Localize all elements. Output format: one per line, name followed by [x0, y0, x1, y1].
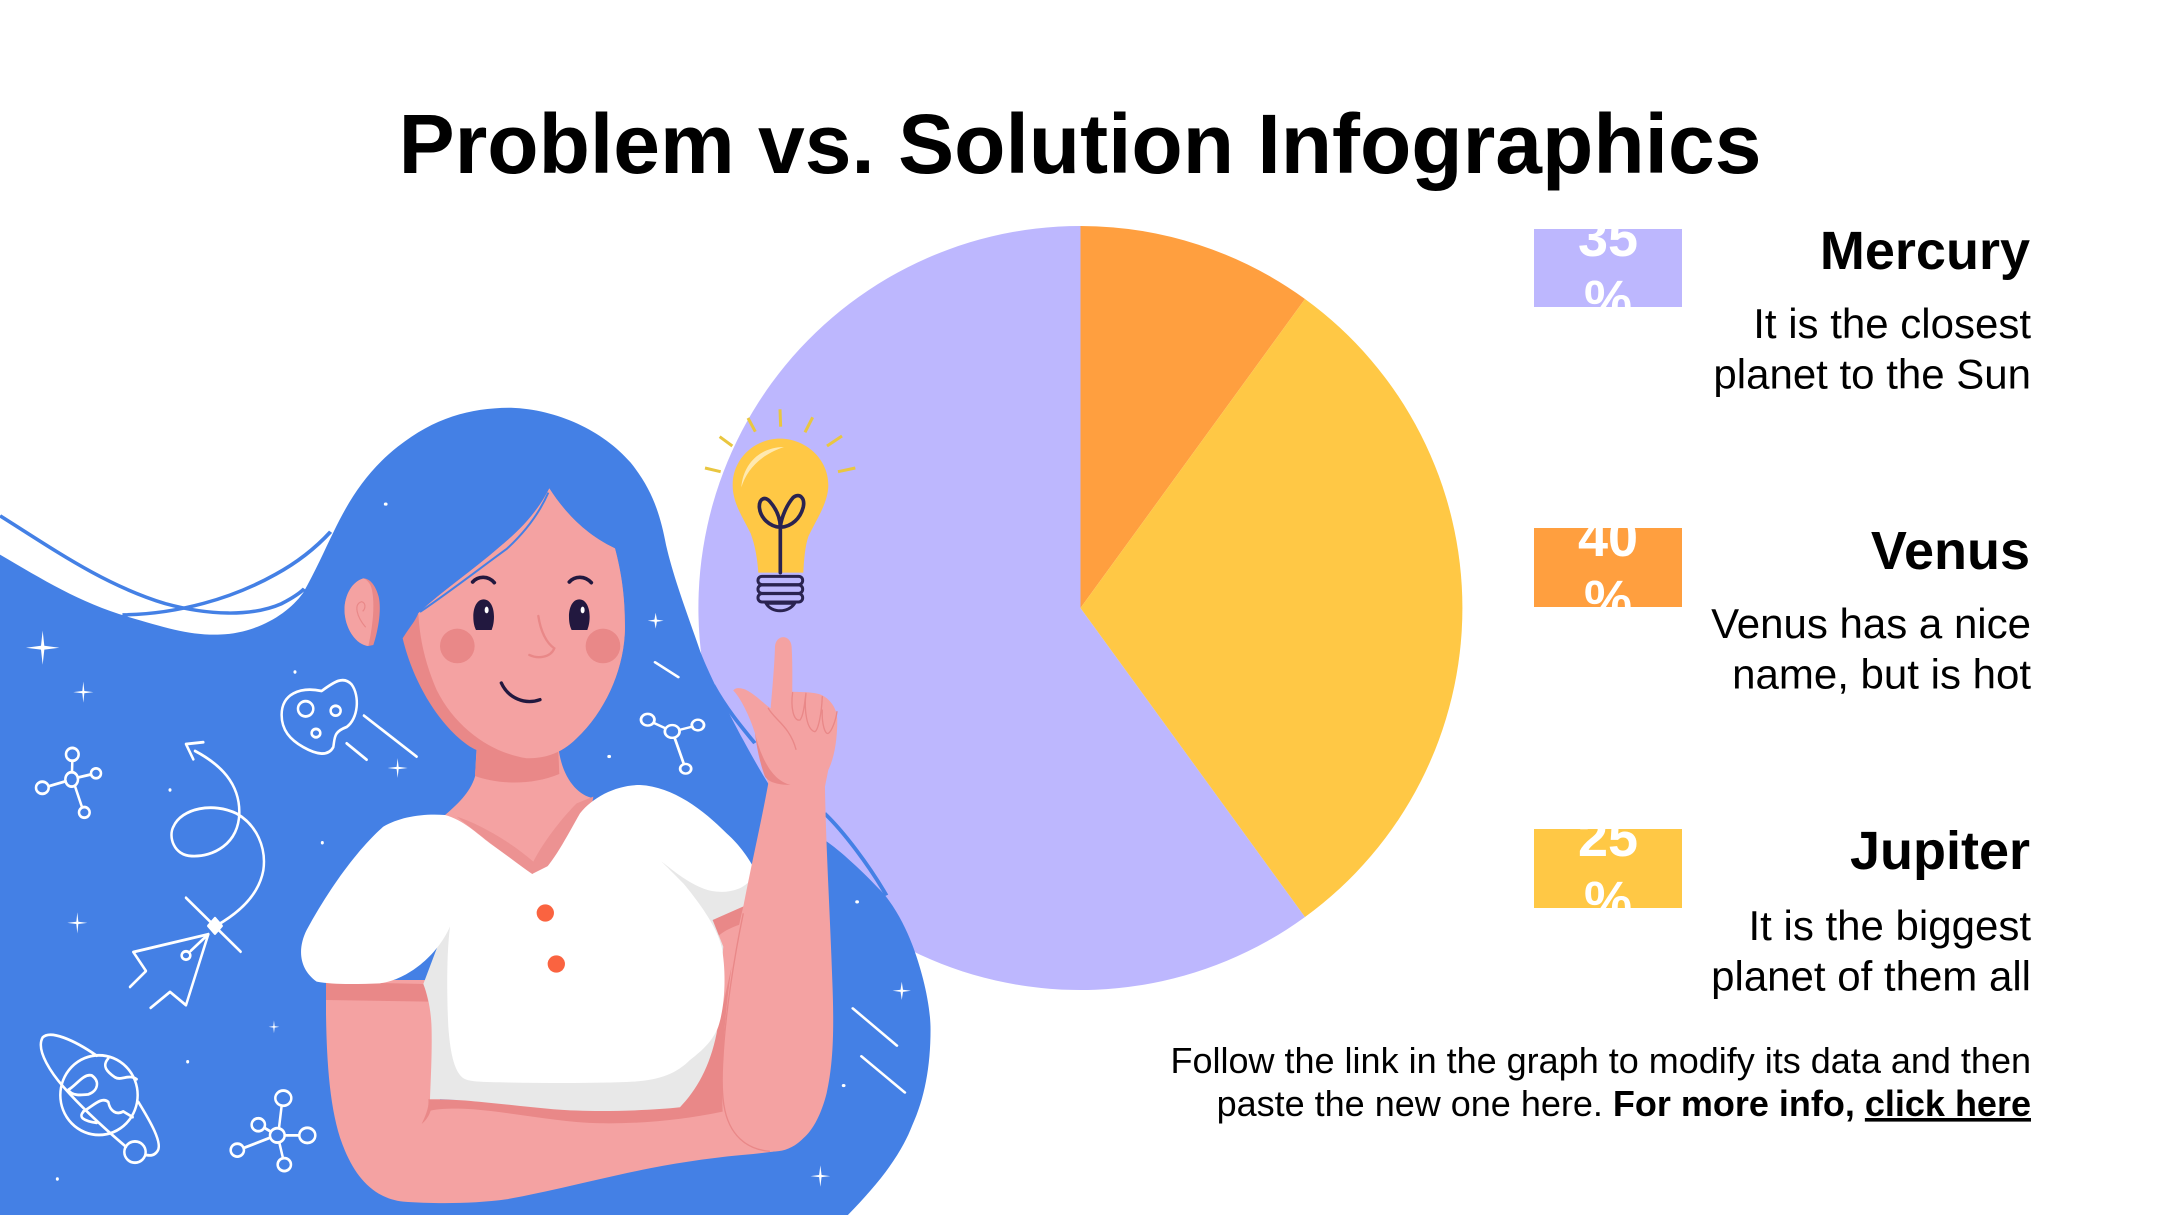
pie slice: purple [698, 226, 1305, 990]
nose [529, 616, 554, 657]
percent box 35%: 35 [1578, 208, 1638, 268]
space doodles [26, 631, 417, 1179]
curved arrow [171, 742, 264, 952]
molecule left [36, 748, 101, 818]
stars [26, 631, 408, 1033]
arm fold shadow [422, 967, 732, 1124]
footer note: paste the new one here. [1217, 1083, 1613, 1124]
footer note: For more info, click here [1613, 1083, 2031, 1124]
asteroid [282, 680, 417, 760]
description: Venus has a nice [1711, 600, 2031, 647]
legend: Jupiter [1534, 829, 2031, 999]
molecule bottom [231, 1091, 315, 1171]
small dots [386, 504, 857, 1086]
legend: Venus [1534, 528, 2031, 694]
neck shadow [475, 750, 559, 782]
description: It is the biggest [1748, 902, 2031, 949]
small dots [57, 672, 322, 1179]
forearm edge [722, 913, 770, 1151]
shadow behind right sleeve [713, 903, 748, 936]
cheeks [440, 629, 620, 663]
bang strand [420, 493, 548, 612]
eyebrows [473, 577, 591, 583]
hair strands [0, 516, 886, 895]
percent box 40%: 40 [1578, 508, 1638, 568]
wrist crease [755, 733, 791, 785]
stars [648, 613, 911, 1187]
percent box 35%: % [1584, 270, 1632, 330]
percent box 25% [1534, 829, 1682, 908]
heading: Mercury [1820, 221, 2030, 281]
button top [537, 904, 554, 922]
shirt body [447, 840, 725, 1083]
ear [345, 578, 380, 646]
chest shading [457, 797, 593, 880]
pie chart [698, 226, 1462, 990]
light rays [705, 409, 855, 472]
button bottom [548, 955, 565, 973]
planet with ring and moon [41, 1035, 159, 1163]
bulb highlight [741, 447, 784, 487]
molecule right [641, 714, 704, 774]
forearm and hand [723, 637, 837, 1152]
filament [759, 496, 804, 573]
eyes [473, 599, 590, 630]
smile [501, 683, 540, 701]
heading: Jupiter [1850, 821, 2030, 881]
shirt sleeve left [301, 815, 537, 984]
space doodles right [386, 504, 911, 1187]
eye highlights [485, 607, 585, 613]
upper arm and lower arm [326, 903, 773, 1203]
pie slice: yellow [1080, 299, 1462, 917]
title: Problem vs. Solution Infographics [399, 97, 1761, 191]
description: planet to the Sun [1713, 350, 2031, 398]
sleeve shadow on arm [326, 982, 428, 1002]
illustration: girl with idea [0, 408, 931, 1215]
face [418, 488, 625, 758]
bulb base [758, 576, 803, 611]
pie slice: orange [1080, 226, 1305, 608]
inner ear [357, 602, 366, 627]
footer note: Follow the link in the graph to modify its data and then [1170, 1040, 2031, 1081]
percent box 40% [1534, 528, 1682, 607]
bulb glass [733, 439, 828, 573]
shirt shade [423, 847, 755, 1111]
description: name, but is hot [1732, 650, 2031, 698]
rocket cursor [130, 934, 208, 1008]
description: It is the closest [1753, 300, 2031, 347]
legend: Mercury [1534, 229, 2031, 397]
percent box 25%: 25 [1578, 808, 1638, 868]
body, shirt and arm [301, 637, 837, 1203]
icon: light bulb [705, 409, 855, 611]
percent box 40%: % [1584, 570, 1632, 630]
hair and blue background blob [0, 408, 931, 1215]
percent box 35% [1534, 229, 1682, 307]
face shadow [403, 488, 625, 758]
face and neck [345, 488, 625, 880]
percent box 25%: % [1584, 871, 1632, 931]
finger and palm lines [768, 693, 837, 749]
heading: Venus [1871, 521, 2030, 581]
description: planet of them all [1711, 952, 2031, 1000]
shirt shoulder right [537, 785, 755, 913]
speed lines [655, 662, 905, 1092]
neck [443, 747, 593, 880]
